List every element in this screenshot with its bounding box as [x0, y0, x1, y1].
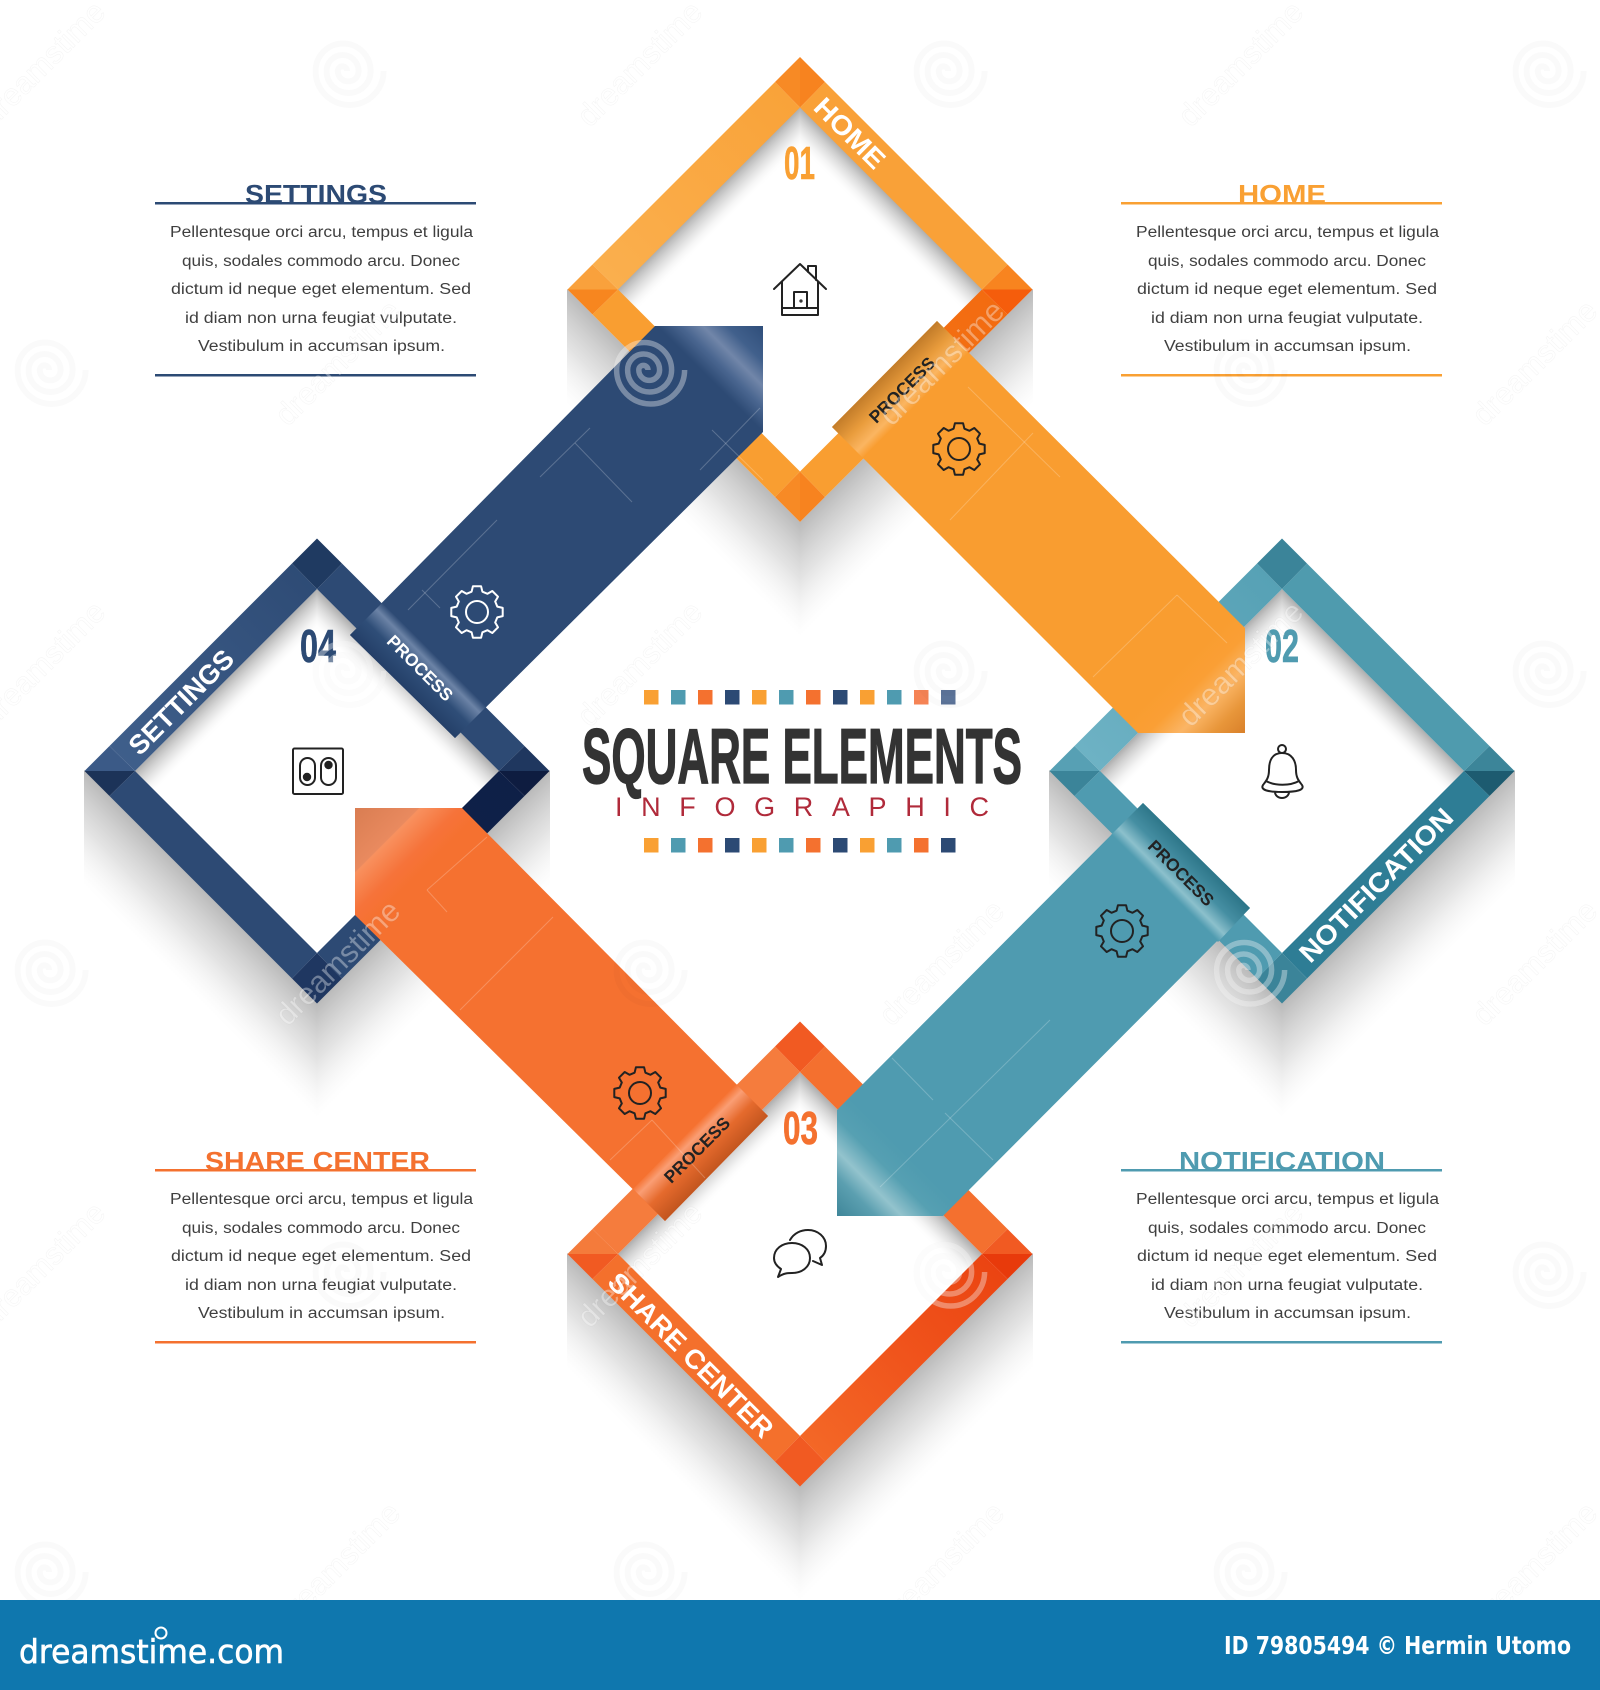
inner shadow	[618, 107, 982, 331]
icon: toggle switches	[293, 748, 343, 794]
bottom square row	[644, 838, 956, 852]
panel: step 02 notification diamond	[1049, 538, 1515, 1118]
text block: NOTIFICATION	[1121, 1146, 1442, 1344]
watermark text: dreamstime	[1171, 1195, 1310, 1334]
body copy: Vestibulum in accumsan ipsum.	[1164, 1305, 1411, 1322]
icon: chat bubbles	[774, 1230, 826, 1277]
number 01: 01	[784, 137, 815, 189]
tab label: PROCESS: PROCESS	[383, 631, 457, 705]
arrow: share center process ribbon (deep orange)	[355, 808, 768, 1221]
icon: gear	[451, 586, 503, 638]
body copy: Vestibulum in accumsan ipsum.	[198, 1305, 445, 1322]
body copy	[170, 224, 473, 355]
watermark text: dreamstime	[570, 594, 709, 733]
heading: SHARE CENTER	[205, 1146, 430, 1176]
heading: SETTINGS	[245, 179, 387, 209]
watermark text: dreamstime	[268, 893, 407, 1032]
tab label: PROCESS: PROCESS	[660, 1113, 734, 1187]
icon: bell	[1262, 745, 1303, 798]
centre title block	[582, 690, 1022, 852]
title: SQUARE ELEMENTS: SQUARE ELEMENTS	[582, 712, 1022, 800]
body copy: id diam non urna feugiat vulputate.	[1151, 310, 1423, 327]
drop shadow	[84, 770, 550, 1118]
drop shadow	[1049, 770, 1515, 1118]
heading: HOME	[1238, 179, 1326, 209]
ribbon label: SHARE CENTER: SHARE CENTER	[602, 1267, 779, 1444]
body copy: quis, sodales commodo arcu. Donec	[182, 1220, 460, 1237]
icon: gear	[614, 1067, 666, 1119]
inner shadow	[618, 1072, 982, 1296]
text block: SETTINGS	[155, 179, 476, 376]
arrow: home process ribbon (orange)	[832, 321, 1245, 733]
body copy: Vestibulum in accumsan ipsum.	[198, 338, 445, 355]
watermark text: dreamstime	[872, 1495, 1011, 1634]
body copy: id diam non urna feugiat vulputate.	[1151, 1277, 1423, 1294]
fold tab	[633, 1084, 768, 1221]
body copy: Pellentesque orci arcu, tempus et ligula	[170, 224, 473, 241]
icon: gear	[933, 423, 985, 475]
watermark text: dreamstime	[268, 1495, 407, 1634]
number 02: 02	[1265, 620, 1299, 672]
top square row	[644, 690, 956, 704]
tab label: PROCESS: PROCESS	[1144, 836, 1218, 910]
ribbon label: HOME: HOME	[808, 92, 891, 175]
drop shadow	[567, 289, 1033, 637]
fold tab	[832, 321, 969, 459]
drop shadow	[567, 1253, 1033, 1601]
diamond frame	[1050, 538, 1514, 1004]
text block: HOME	[1121, 179, 1442, 376]
body copy	[1136, 1191, 1439, 1322]
watermark text: dreamstime	[872, 893, 1011, 1032]
panel: step 01 home diamond	[567, 57, 1033, 637]
heading: NOTIFICATION	[1179, 1146, 1385, 1176]
inner shadow	[135, 589, 499, 813]
icon: house	[774, 264, 826, 315]
arrow: notification process ribbon (teal)	[837, 803, 1250, 1216]
body copy: id diam non urna feugiat vulputate.	[185, 1277, 457, 1294]
body copy: dictum id neque eget elementum. Sed	[1137, 1248, 1437, 1265]
body copy: dictum id neque eget elementum. Sed	[171, 1248, 471, 1265]
body copy	[1136, 224, 1439, 355]
body copy: Pellentesque orci arcu, tempus et ligula	[1136, 224, 1439, 241]
diamond frame	[84, 538, 550, 1004]
diamond frame	[568, 57, 1032, 522]
watermark text: dreamstime	[570, 1195, 709, 1334]
fold tab	[1111, 803, 1250, 942]
diamond frame	[568, 1022, 1032, 1486]
body copy: Pellentesque orci arcu, tempus et ligula	[170, 1191, 473, 1208]
watermark text: dreamstime	[872, 293, 1011, 432]
watermark text: dreamstime	[268, 293, 407, 432]
subtitle: INFOGRAPHIC: INFOGRAPHIC	[615, 792, 989, 822]
number 03: 03	[783, 1102, 818, 1154]
body copy: Pellentesque orci arcu, tempus et ligula	[1136, 1191, 1439, 1208]
body copy: Vestibulum in accumsan ipsum.	[1164, 338, 1411, 355]
body copy	[170, 1191, 473, 1322]
body copy: quis, sodales commodo arcu. Donec	[1148, 253, 1426, 270]
body copy: dictum id neque eget elementum. Sed	[171, 281, 471, 298]
ribbon label: SETTINGS: SETTINGS	[123, 644, 240, 761]
footer bar	[0, 1600, 1600, 1690]
body copy: quis, sodales commodo arcu. Donec	[1148, 1220, 1426, 1237]
text block: SHARE CENTER	[155, 1146, 476, 1344]
tab label: PROCESS: PROCESS	[865, 353, 939, 427]
panel: step 03 share center diamond	[567, 1022, 1033, 1601]
fold tab	[350, 603, 487, 738]
inner shadow	[1100, 589, 1464, 813]
body copy: dictum id neque eget elementum. Sed	[1137, 281, 1437, 298]
footer logo: dreamstime.com: dreamstime.com	[19, 1632, 284, 1671]
number 04: 04	[300, 620, 336, 672]
arrow: settings process ribbon (navy)	[350, 326, 763, 738]
icon: gear	[1096, 905, 1148, 957]
panel: step 04 settings diamond	[84, 538, 550, 1118]
ribbon label: NOTIFICATION: NOTIFICATION	[1293, 802, 1459, 968]
watermark text: dreamstime	[1171, 594, 1310, 733]
body copy: quis, sodales commodo arcu. Donec	[182, 253, 460, 270]
body copy: id diam non urna feugiat vulputate.	[185, 310, 457, 327]
